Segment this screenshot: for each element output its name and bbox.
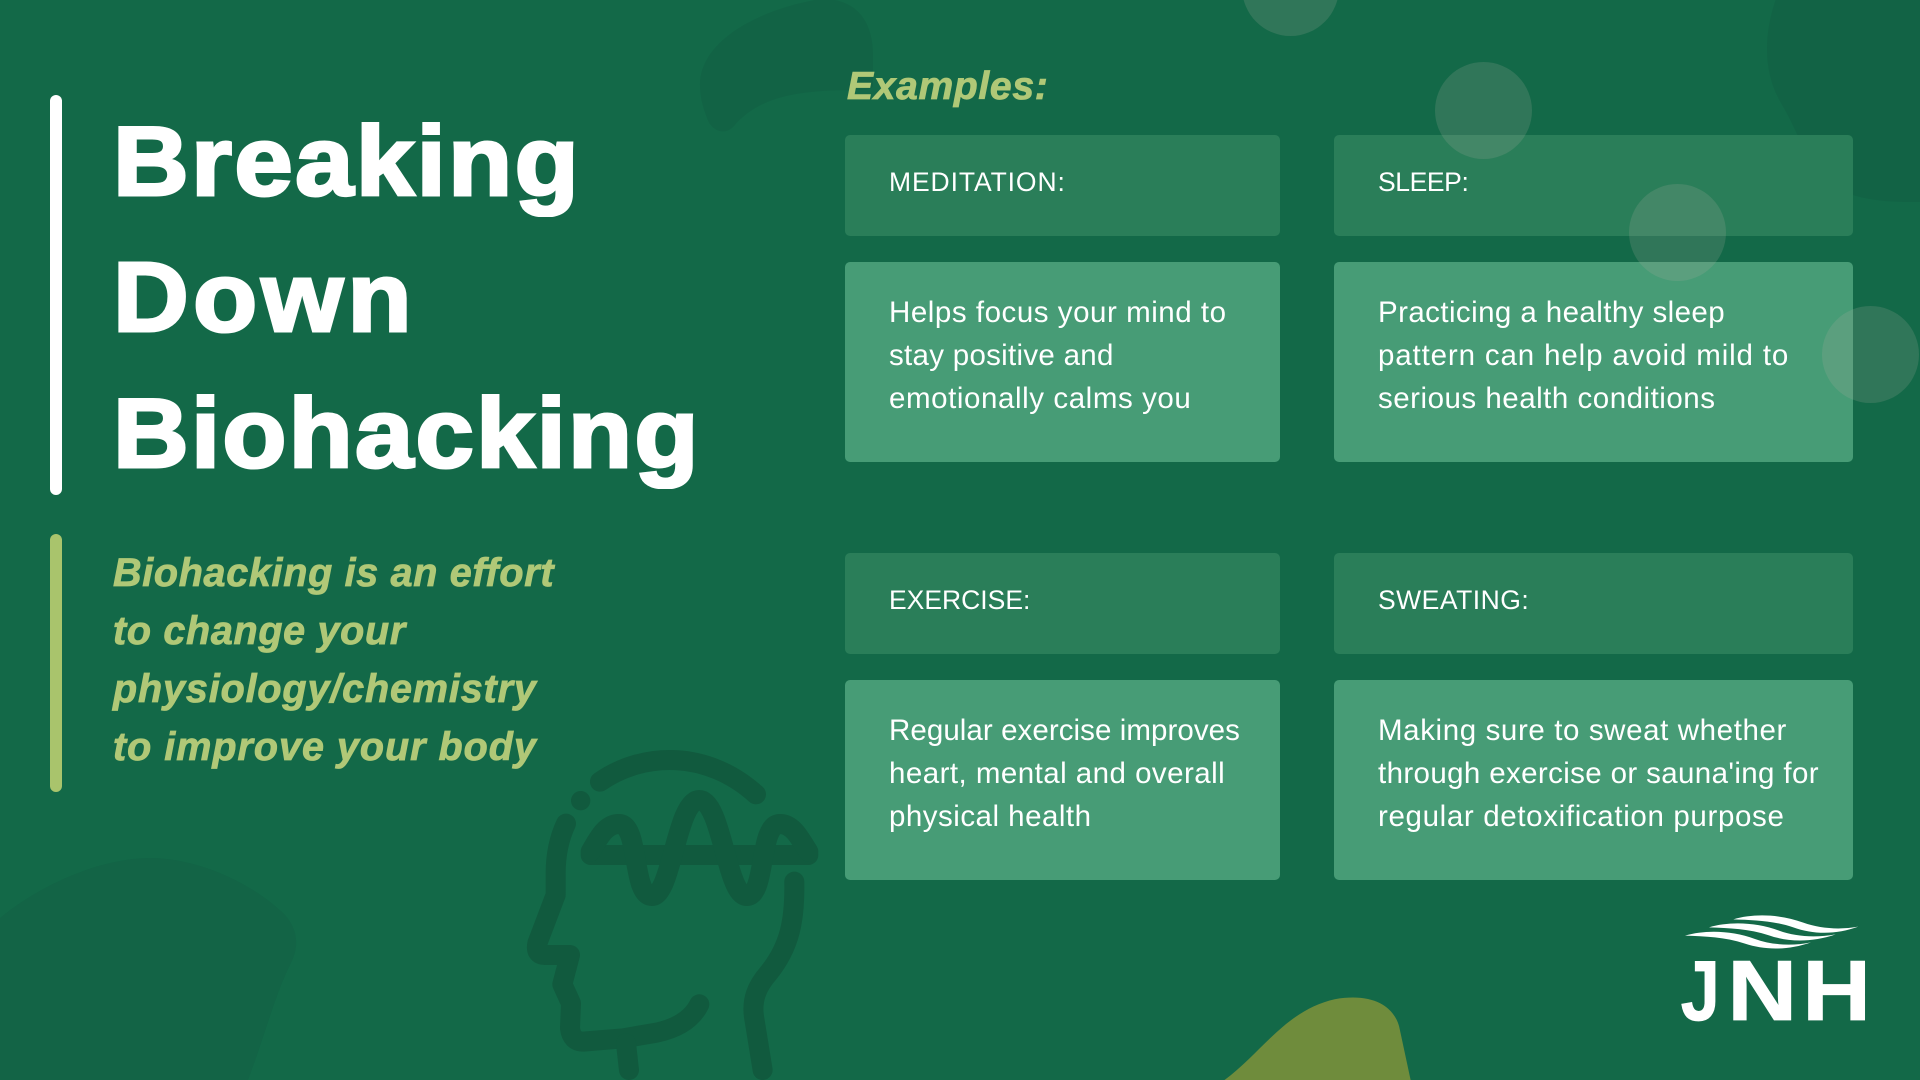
panel: meditation text: emotionally calms you bbox=[889, 382, 1191, 415]
decorative circle 2 bbox=[1435, 62, 1532, 159]
panel: sweating text: regular detoxification purpose bbox=[1378, 800, 1785, 833]
subtitle bbox=[112, 551, 556, 769]
title: Down bbox=[113, 242, 416, 352]
examples heading: Examples: bbox=[847, 65, 1048, 108]
subtitle: to improve your body bbox=[113, 725, 537, 769]
panel: sleep text: Practicing a healthy sleep bbox=[1378, 296, 1725, 329]
panel: sleep text bbox=[1334, 262, 1853, 462]
panel: exercise header bbox=[845, 553, 1280, 654]
subtitle: to change your bbox=[113, 609, 406, 653]
panel: meditation text: Helps focus your mind to bbox=[889, 296, 1227, 329]
panel: exercise header: EXERCISE: bbox=[889, 585, 1030, 615]
panel: meditation text bbox=[845, 262, 1280, 462]
decorative circle 1 bbox=[1242, 0, 1339, 36]
subtitle: physiology/chemistry bbox=[113, 667, 537, 711]
panel: sleep header bbox=[1334, 135, 1853, 236]
logo: JNH: H bbox=[1802, 944, 1871, 1039]
logo: JNH: J bbox=[1681, 943, 1720, 1038]
title bbox=[113, 106, 701, 489]
panel: exercise text bbox=[845, 680, 1280, 880]
panel: sweating text bbox=[1334, 680, 1853, 880]
panel: sleep header: SLEEP: bbox=[1378, 167, 1468, 197]
panel: sweating text: Making sure to sweat whether bbox=[1378, 714, 1787, 747]
panel: sweating text: through exercise or sauna'ing for bbox=[1378, 757, 1819, 790]
panel: meditation header bbox=[845, 135, 1280, 236]
panel: meditation text: stay positive and bbox=[889, 339, 1114, 372]
panel: sweating header: SWEATING: bbox=[1378, 585, 1529, 615]
logo: JNH: N bbox=[1727, 944, 1797, 1039]
panel: exercise text: physical health bbox=[889, 800, 1092, 833]
panel: sleep text: serious health conditions bbox=[1378, 382, 1715, 415]
panel: exercise text: heart, mental and overall bbox=[889, 757, 1225, 790]
panel: sleep text: pattern can help avoid mild to bbox=[1378, 339, 1789, 372]
title accent bar bbox=[50, 95, 62, 495]
panel: meditation header: MEDITATION: bbox=[889, 167, 1066, 197]
decorative circle 3 bbox=[1629, 184, 1726, 281]
panel: exercise text: Regular exercise improves bbox=[889, 714, 1240, 747]
logo: JNH bbox=[1681, 915, 1871, 1039]
subtitle: Biohacking is an effort bbox=[113, 551, 554, 595]
decorative circle 4 bbox=[1822, 306, 1919, 403]
title: Breaking bbox=[113, 106, 581, 216]
subtitle accent bar bbox=[50, 534, 62, 792]
title: Biohacking bbox=[113, 378, 701, 488]
panel: sweating header bbox=[1334, 553, 1853, 654]
